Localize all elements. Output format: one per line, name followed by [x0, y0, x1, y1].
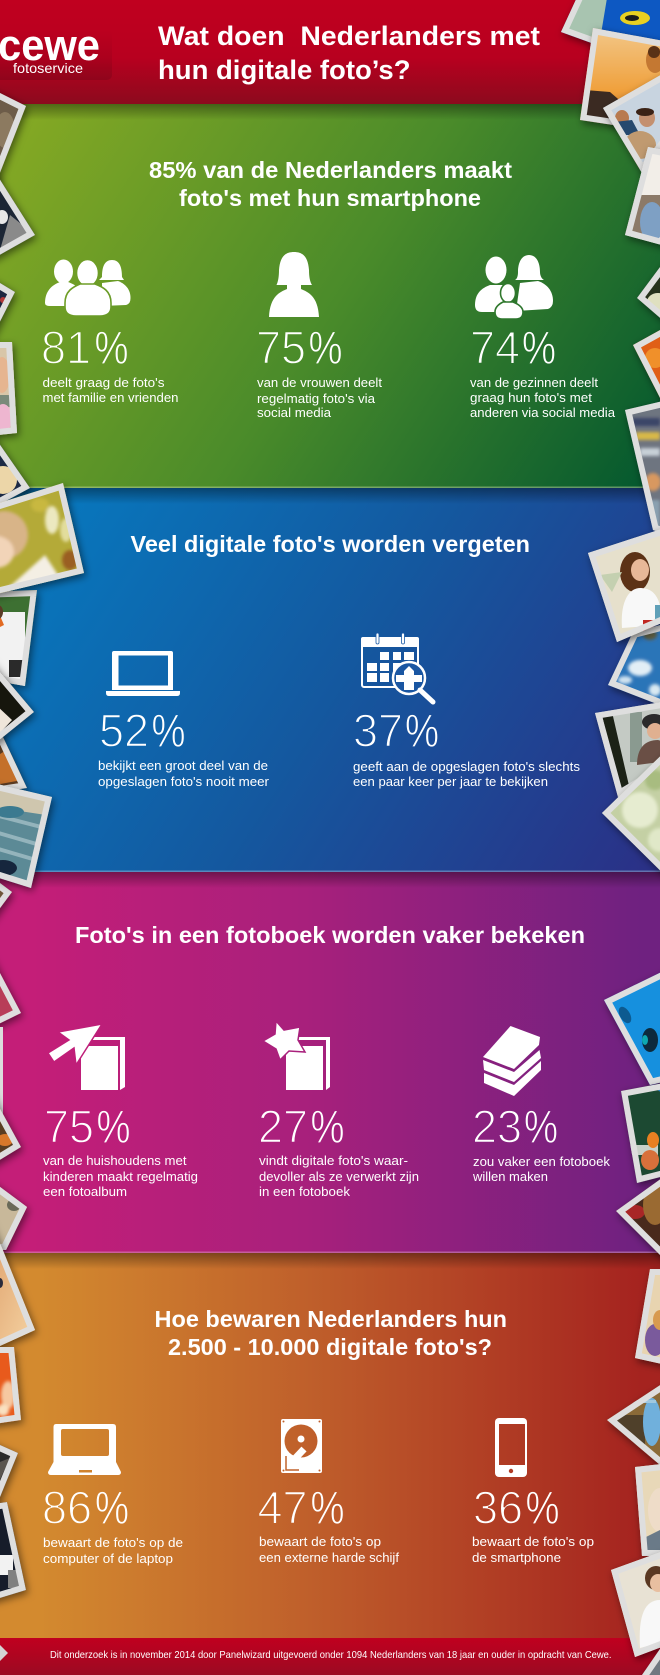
stat: 86%: bewaart de foto's op de — [43, 1535, 183, 1550]
icon: calendar with magnifier — [361, 633, 433, 702]
heading: orange section — [154, 1306, 507, 1360]
stat: 75% households: kinderen maakt regelmatig — [43, 1169, 198, 1184]
stat: 36%: de smartphone — [472, 1550, 561, 1565]
logo: cewe fotoservice: fotoservice — [13, 60, 83, 76]
icon: woman — [269, 252, 319, 317]
stat: 74% families: % — [522, 322, 556, 374]
stat: 36%: 36 — [473, 1482, 523, 1534]
stat: 47%: bewaart de foto's op — [259, 1534, 381, 1549]
panel: green smartphone section — [0, 104, 660, 488]
stat: 37%: % — [405, 704, 439, 756]
stat: 52%: opgeslagen foto's nooit meer — [98, 774, 270, 789]
stat: 23% — [472, 1100, 610, 1184]
stat: 75% households: van de huishoudens met — [43, 1153, 187, 1168]
stat: 52%: % — [152, 704, 186, 756]
stat: 23%: willen maken — [472, 1169, 548, 1184]
title: Wat doen Nederlanders met — [158, 21, 540, 51]
photo collage: right edge — [555, 0, 660, 1675]
stat: 81%: % — [94, 322, 128, 374]
stat: 27%: devoller als ze verwerkt zijn — [259, 1169, 419, 1184]
stat: 52%: bekijkt een groot deel van de — [98, 758, 268, 773]
icon: stack of books — [483, 1026, 541, 1096]
stat: 74% families: van de gezinnen deelt — [470, 375, 598, 390]
stat: 75% women: 75 — [256, 322, 306, 374]
stat: 47%: 47 — [258, 1482, 308, 1534]
photo collage: left edge — [0, 83, 85, 1675]
stat: 37%: geeft aan de opgeslagen foto's slechts — [353, 759, 581, 774]
stat: 37%: 37 — [353, 704, 403, 756]
stat: 74% families: graag hun foto's met — [470, 390, 592, 405]
stat: 36%: bewaart de foto's op — [472, 1534, 594, 1549]
heading: orange section: 2.500 - 10.000 digitale foto's? — [168, 1334, 492, 1360]
stat: 81%: 81 — [41, 322, 91, 374]
icon: arrow and book — [48, 1024, 125, 1090]
heading: blue section: Veel digitale foto's worden vergeten — [130, 531, 530, 557]
heading: green section: foto's met hun smartphone — [179, 185, 481, 211]
stat: 47%: % — [310, 1482, 344, 1534]
icon: laptop solid — [48, 1424, 121, 1475]
stat: 75% households — [43, 1100, 198, 1199]
stat: 52% — [98, 704, 270, 789]
stat: 86% — [42, 1482, 183, 1566]
stat: 47% — [258, 1482, 399, 1565]
stat: 74% families: anderen via social media — [470, 405, 616, 420]
stat: 23%: zou vaker een fotoboek — [473, 1154, 610, 1169]
stat: 86%: computer of de laptop — [43, 1551, 173, 1566]
stat: 27%: 27 — [258, 1100, 308, 1152]
stat: 75% women: van de vrouwen deelt — [257, 375, 382, 390]
stat: 75% women: social media — [257, 405, 332, 420]
stat: 37% — [353, 704, 581, 789]
stat: 74% families — [470, 322, 616, 420]
stat: 47%: een externe harde schijf — [259, 1550, 399, 1565]
stat: 23%: 23 — [472, 1100, 522, 1152]
panel: orange storage section — [0, 1253, 660, 1638]
stat: 27%: in een fotoboek — [259, 1184, 351, 1199]
stat: 81%: deelt graag de foto's — [42, 375, 165, 390]
stat: 75% women: % — [308, 322, 342, 374]
stat: 81%: met familie en vrienden — [42, 390, 178, 405]
icon: three people — [45, 260, 130, 316]
stat: 37%: een paar keer per jaar te bekijken — [353, 774, 548, 789]
footer bar with source note — [0, 1638, 660, 1675]
footer bar with source note: Dit onderzoek is in november 2014 door Panelwizard uitgevoerd onder 1094 Nederlanders van 18 jaar en ouder in opdracht van Cewe. — [50, 1649, 612, 1661]
heading: pink section: Foto's in een fotoboek worden vaker bekeken — [75, 922, 585, 948]
stat: 36% — [472, 1482, 594, 1565]
stat: 74% families: 74 — [470, 322, 520, 374]
heading: green section — [149, 157, 512, 211]
stat: 75% households: 75 — [44, 1100, 94, 1152]
panel: pink photobook section — [0, 872, 660, 1253]
title — [158, 21, 540, 85]
icon: star and book — [263, 1021, 330, 1090]
icon: smartphone — [495, 1418, 527, 1477]
stat: 75% households: % — [96, 1100, 130, 1152]
icon: laptop outline — [106, 651, 180, 696]
title: hun digitale foto’s? — [158, 55, 410, 85]
icon: family — [475, 255, 553, 319]
header banner — [0, 0, 660, 104]
stat: 27%: vindt digitale foto's waar- — [259, 1153, 408, 1168]
heading: green section: 85% van de Nederlanders maakt — [149, 157, 512, 183]
panel: blue forgotten photos section — [0, 488, 660, 872]
icon: hard disk — [281, 1419, 322, 1473]
stat: 75% women — [256, 322, 382, 420]
stat: 52%: 52 — [99, 704, 149, 756]
stat: 86%: 86 — [42, 1482, 92, 1534]
stat: 86%: % — [95, 1482, 129, 1534]
stat: 36%: % — [526, 1482, 560, 1534]
stat: 81% — [41, 322, 178, 405]
stat: 23%: % — [524, 1100, 558, 1152]
stat: 75% women: regelmatig foto's via — [257, 391, 376, 406]
logo: cewe fotoservice: cewe — [0, 21, 100, 70]
stat: 27% — [258, 1100, 419, 1199]
stat: 27%: % — [310, 1100, 344, 1152]
heading: orange section: Hoe bewaren Nederlanders hun — [154, 1306, 507, 1332]
stat: 75% households: een fotoalbum — [43, 1184, 127, 1199]
